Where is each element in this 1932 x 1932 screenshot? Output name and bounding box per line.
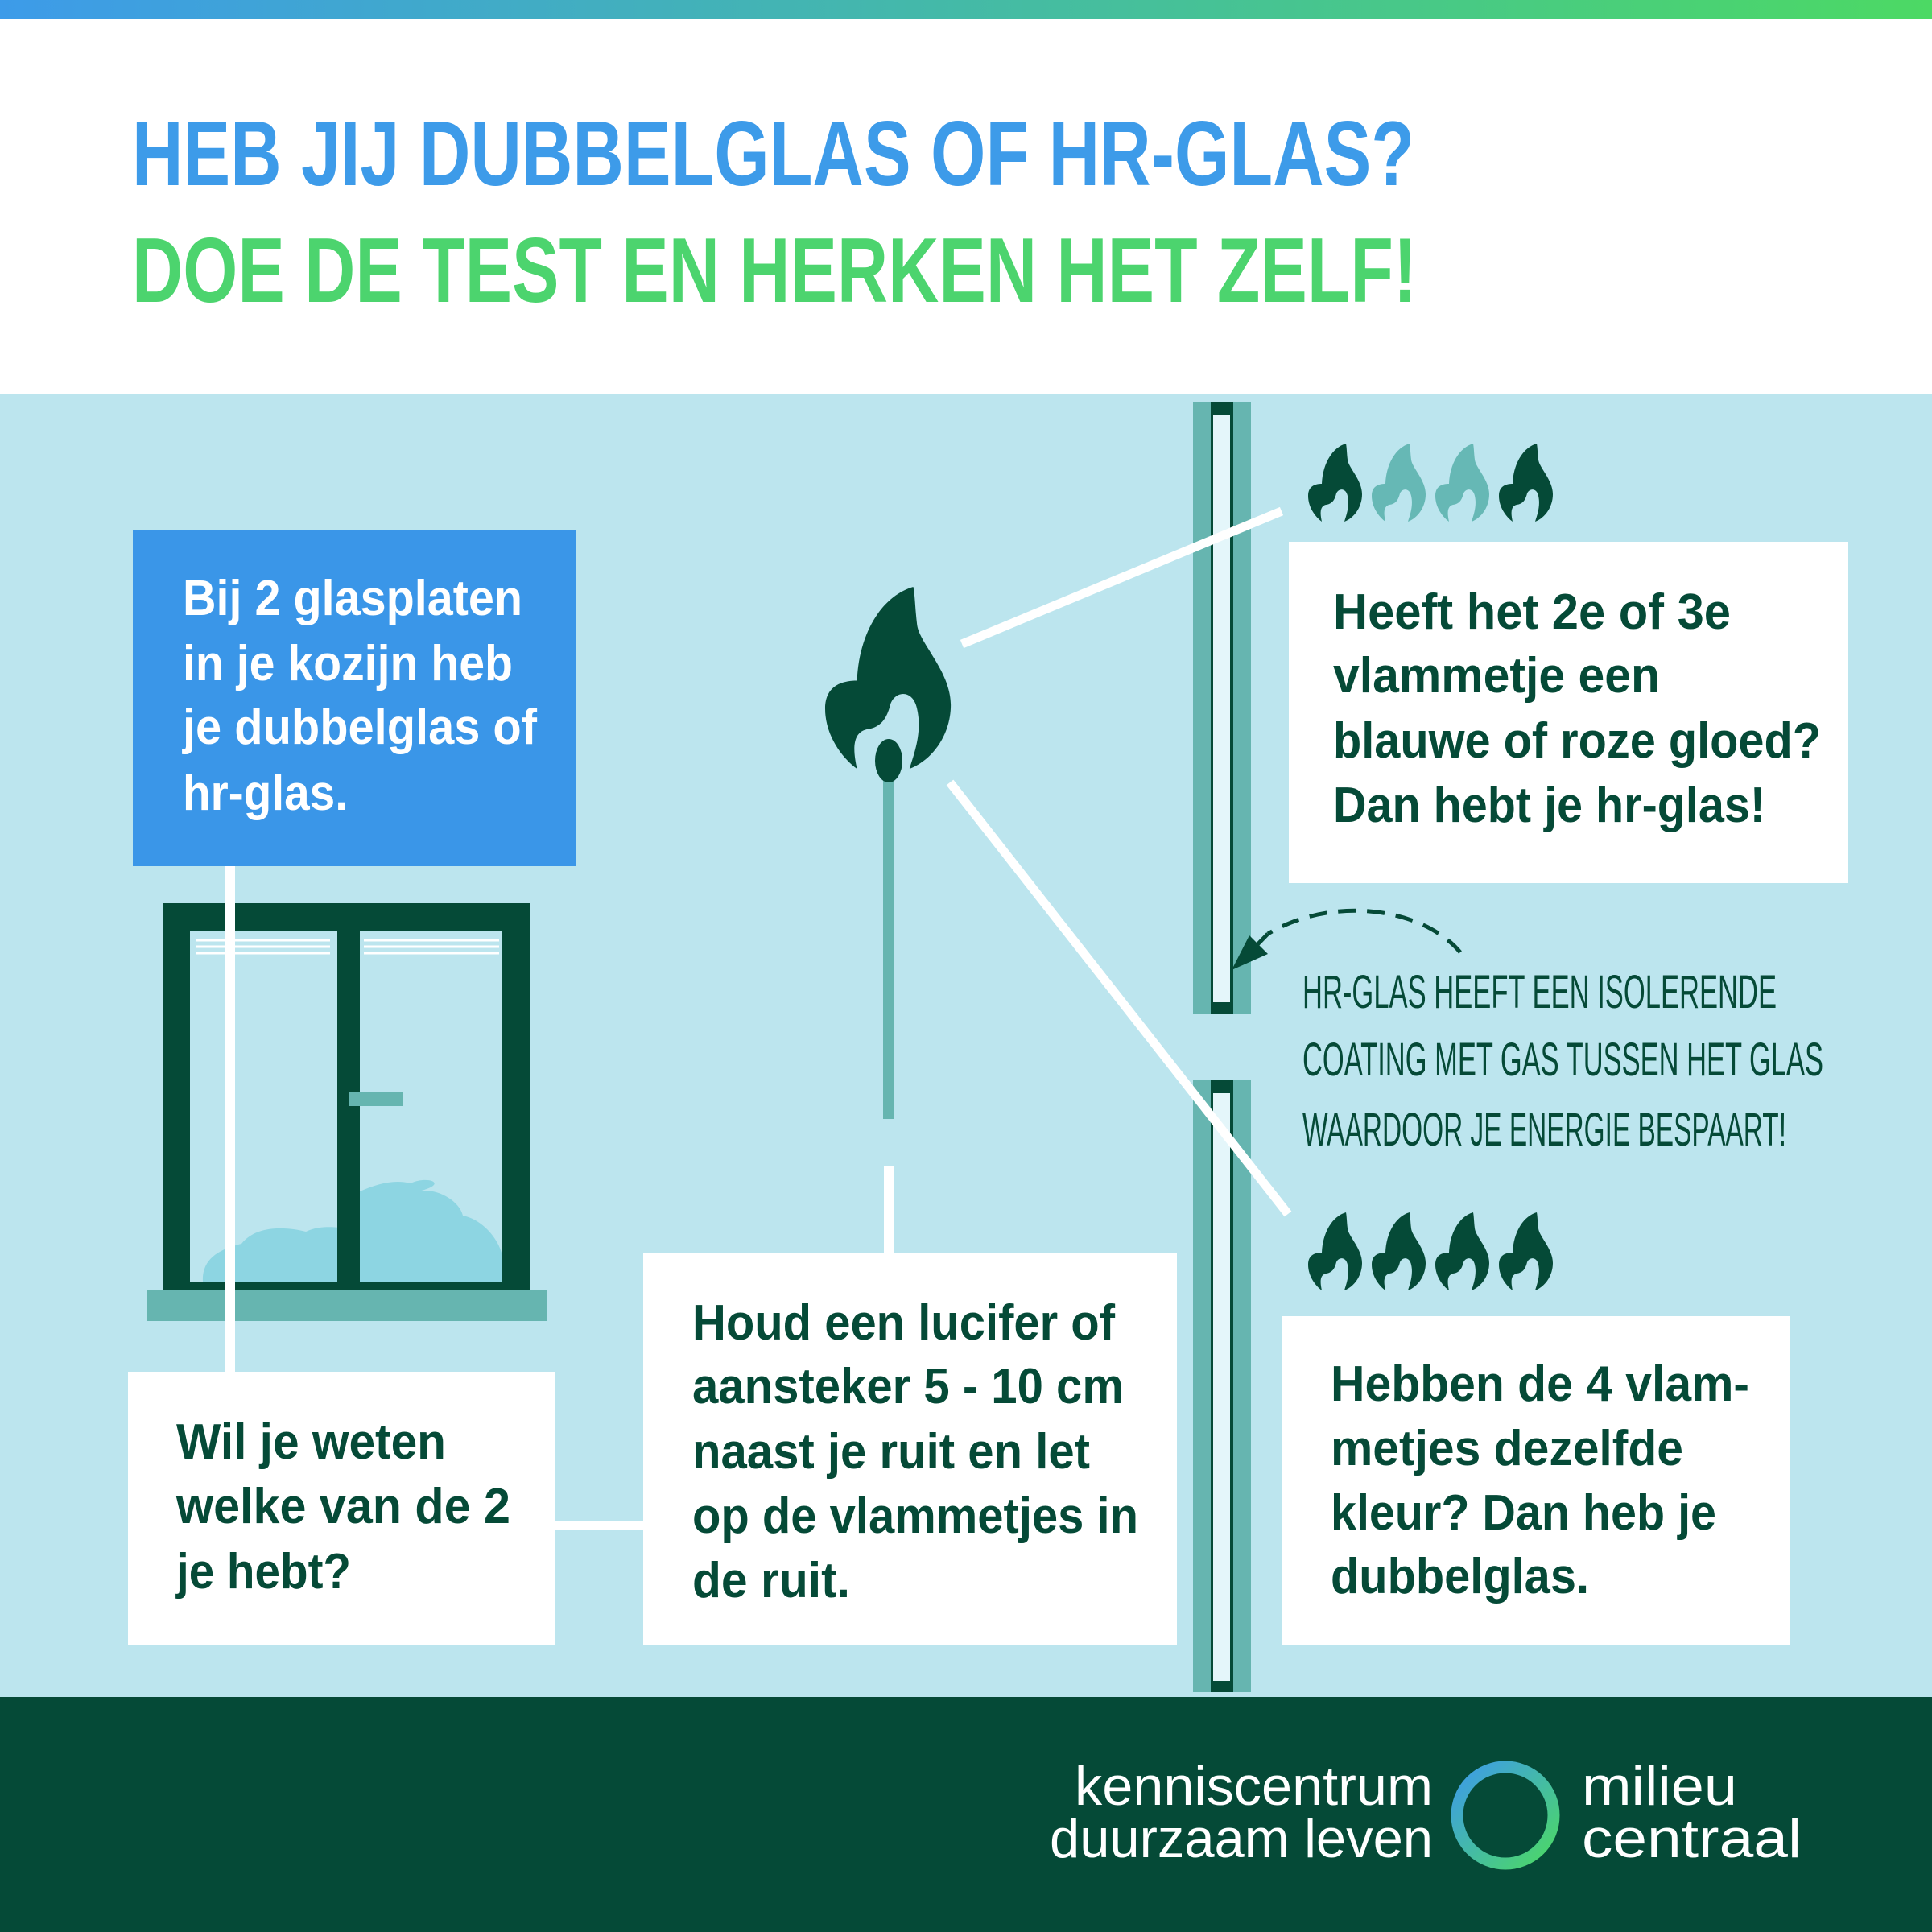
- text box: instructions: aansteker 5 - 10 cm: [692, 1359, 1124, 1414]
- glass pane: hr-glas (top): [1193, 402, 1251, 1014]
- text box: dubbelglas result: kleur? Dan heb je: [1331, 1485, 1716, 1541]
- icon: burning match: [825, 587, 951, 1119]
- text box: Wil je weten: Wil je weten: [176, 1414, 446, 1470]
- text box: instructions: Houd een lucifer of: [692, 1295, 1115, 1351]
- text box: hr-glas result: vlammetje een: [1333, 648, 1660, 704]
- text box: instructions: naast je ruit en let: [692, 1424, 1090, 1480]
- icon: logo ring: [1457, 1767, 1554, 1864]
- arrow: dashed curve to coating: [1232, 910, 1460, 970]
- text box: instructions: [643, 1253, 1177, 1645]
- connector: question to instructions: [555, 1521, 643, 1530]
- pointer lines from flame: [950, 511, 1288, 1214]
- icon: flames dubbelglas (all dark): [1308, 1212, 1553, 1290]
- title: DOE DE TEST EN HERKEN HET ZELF!: [132, 220, 1417, 322]
- text box: instructions: de ruit.: [692, 1553, 850, 1608]
- text box: dubbelglas result: [1282, 1316, 1790, 1645]
- title: HEB JIJ DUBBELGLAS OF HR-GLAS?: [132, 103, 1414, 205]
- logo: milieu centraal: kenniscentrum: [1075, 1756, 1433, 1817]
- text box: Wil je weten: je hebt?: [175, 1544, 351, 1600]
- text box: Wil je weten: [128, 1372, 555, 1645]
- text box: dubbelglas result: metjes dezelfde: [1331, 1421, 1683, 1476]
- blue box: 2 glasplaten: je dubbelglas of: [182, 700, 537, 755]
- icon: window: [147, 903, 547, 1321]
- text box: dubbelglas result: dubbelglas.: [1331, 1549, 1589, 1604]
- blue box: 2 glasplaten: Bij 2 glasplaten: [183, 571, 522, 626]
- connector: match to instructions: [884, 1166, 894, 1253]
- logo: milieu centraal: duurzaam leven: [1050, 1808, 1433, 1869]
- blue box: 2 glasplaten: hr-glas.: [183, 766, 348, 821]
- footer: [0, 1697, 1932, 1932]
- logo: milieu centraal: milieu: [1582, 1756, 1737, 1817]
- icon: flames hr-glas (dark, light, light, dark): [1308, 444, 1553, 522]
- glass pane: dubbelglas (bottom): [1193, 1080, 1251, 1692]
- text box: hr-glas result: [1289, 542, 1848, 883]
- title: [132, 103, 1417, 322]
- text box: hr-glas result: Dan hebt je hr-glas!: [1333, 778, 1765, 833]
- blue box: 2 glasplaten: [133, 530, 576, 866]
- text box: Wil je weten: welke van de 2: [175, 1479, 510, 1534]
- top gradient bar: [0, 0, 1932, 19]
- text box: hr-glas result: Heeft het 2e of 3e: [1333, 584, 1731, 640]
- logo: milieu centraal: [1050, 1756, 1802, 1869]
- text box: hr-glas result: blauwe of roze gloed?: [1333, 713, 1821, 769]
- connector: blue box to question box: [225, 866, 235, 1372]
- blue box: 2 glasplaten: in je kozijn heb: [183, 636, 513, 691]
- logo: milieu centraal: centraal: [1582, 1808, 1802, 1869]
- handwritten note: coating: [1302, 966, 1823, 1156]
- light blue background panel: [0, 394, 1932, 1697]
- text box: instructions: op de vlammetjes in: [692, 1488, 1138, 1544]
- text box: dubbelglas result: Hebben de 4 vlam-: [1331, 1356, 1749, 1412]
